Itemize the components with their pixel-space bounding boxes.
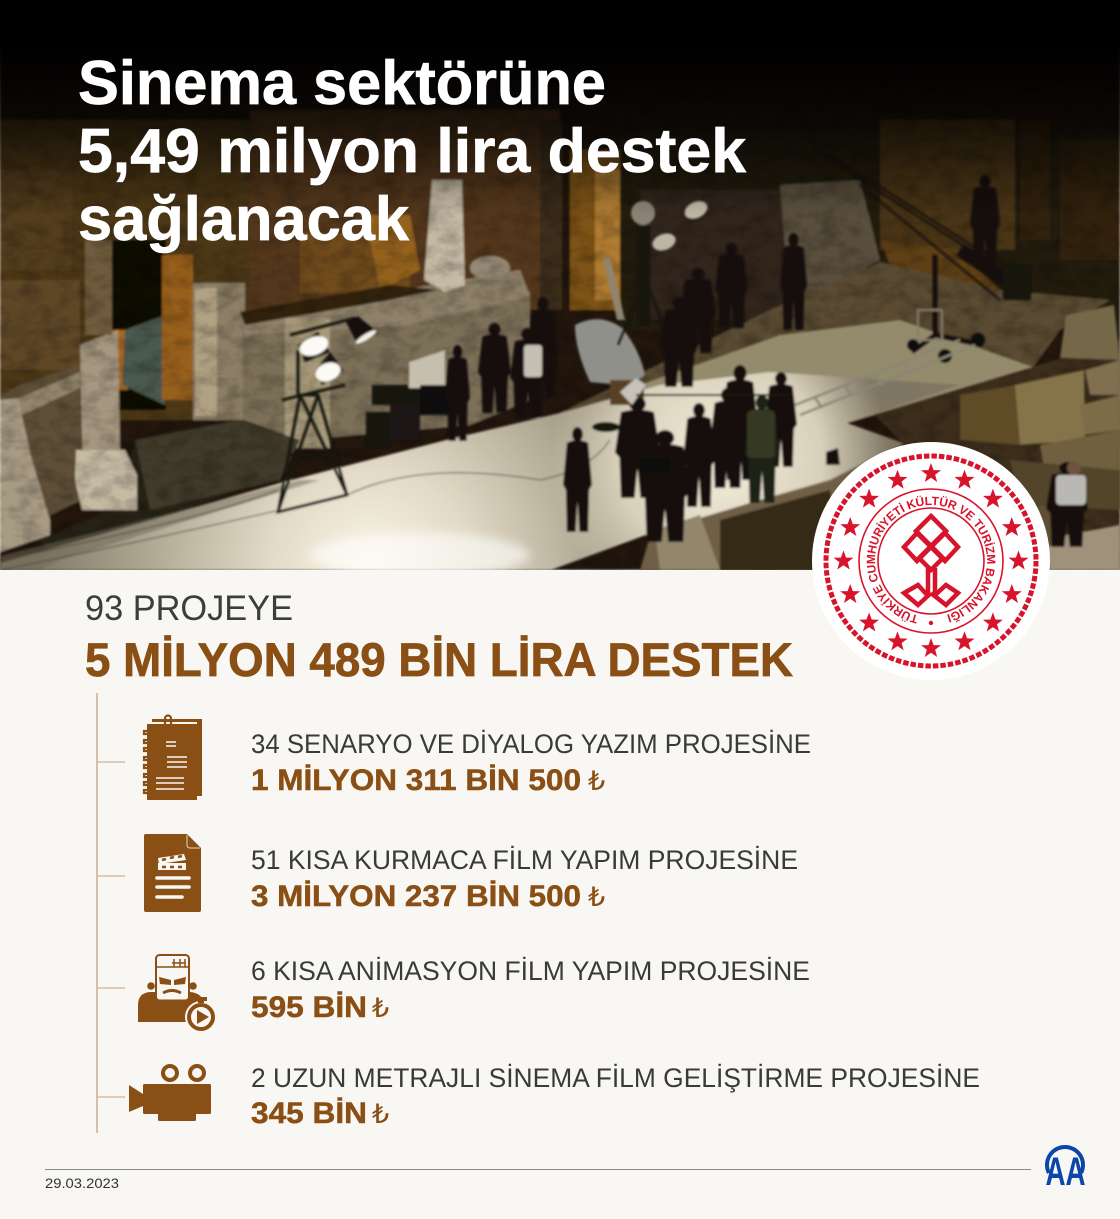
- stone grain: [0, 0, 1120, 570]
- icon: animated character with stopwatch: [138, 955, 217, 1033]
- timeline: [97, 693, 125, 1133]
- title: 5,49 milyon lira destek: [78, 117, 747, 186]
- text: short fiction projects: [251, 844, 798, 913]
- photo: film set in ancient ruins: [0, 0, 1120, 577]
- text: screenplay projects: 1 MİLYON 311 BİN 500: [251, 764, 581, 797]
- lit floor: [0, 372, 960, 570]
- text: feature film projects: 2 UZUN METRAJLI SİNEMA FİLM GELİŞTİRME PROJESİNE: [251, 1062, 980, 1093]
- text: short fiction projects: 3 MİLYON 237 BİN 500: [251, 880, 581, 913]
- text: short fiction projects: ₺: [588, 882, 605, 913]
- seal: Türkiye Kültür ve Turizm Bakanlığı: TÜRKİYE CUMHURİYETİ KÜLTÜR VE TURİZM BAKANLIĞI: [866, 496, 996, 624]
- text: feature film projects: [251, 1062, 980, 1130]
- text: short fiction projects: 51 KISA KURMACA FİLM YAPIM PROJESİNE: [251, 844, 798, 875]
- top fade: [0, 0, 1120, 215]
- title: [78, 49, 747, 254]
- text: screenplay projects: ₺: [588, 766, 605, 797]
- logo: Anadolu Agency: AA: [1046, 1150, 1086, 1194]
- icon: film camera: [129, 1066, 211, 1121]
- title: sağlanacak: [78, 185, 410, 254]
- icon: notebook: [144, 716, 202, 800]
- subtitle: 93 projeye: 93 PROJEYE: [85, 589, 293, 628]
- text: screenplay projects: 34 SENARYO VE DİYALOG YAZIM PROJESİNE: [251, 728, 811, 759]
- footer rule: [45, 1168, 1031, 1170]
- text: animation projects: 595 BİN: [251, 991, 367, 1024]
- text: animation projects: 6 KISA ANİMASYON FİLM YAPIM PROJESİNE: [251, 955, 810, 986]
- headline: total support: 5 MİLYON 489 BİN LİRA DESTEK: [85, 633, 793, 686]
- text: screenplay projects: [251, 728, 811, 797]
- text: feature film projects: 345 BİN: [251, 1097, 367, 1130]
- icon: script document with clapper: [144, 834, 201, 912]
- text: feature film projects: ₺: [372, 1099, 389, 1130]
- text: animation projects: [251, 955, 810, 1024]
- date: 29.03.2023: [45, 1176, 119, 1191]
- seal knot emblem: [904, 516, 958, 605]
- logo: Anadolu Agency: [1046, 1147, 1086, 1194]
- seal: Türkiye Kültür ve Turizm Bakanlığı: [812, 442, 1050, 680]
- text: animation projects: ₺: [372, 993, 389, 1024]
- title: Sinema sektörüne: [78, 49, 606, 118]
